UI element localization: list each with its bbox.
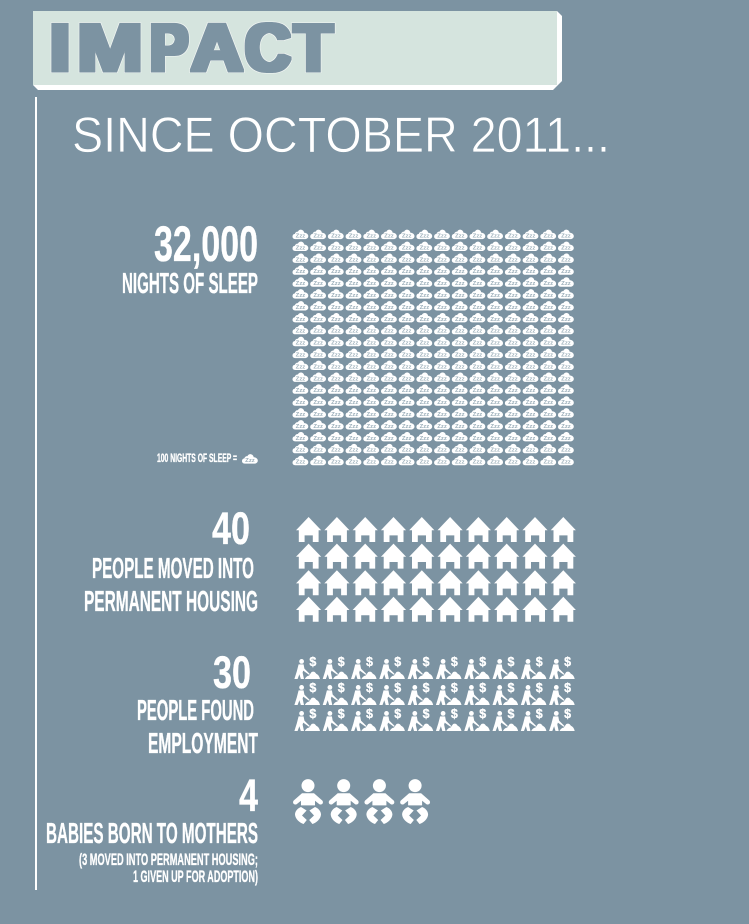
vertical rule — [35, 97, 37, 890]
title: IMPACT — [49, 10, 333, 86]
stat: 4 babies: BABIES BORN TO MOTHERS — [46, 818, 258, 850]
stat: 40 people housed: 40 — [212, 503, 250, 554]
stat: 4 babies — [46, 770, 258, 886]
stat: 4 babies: 1 GIVEN UP FOR ADOPTION) — [133, 867, 258, 886]
title: IMPACT: A — [191, 10, 243, 86]
stat: 32,000 nights of sleep — [122, 216, 258, 300]
title: IMPACT: T — [294, 10, 333, 86]
icon row: babies — [293, 779, 430, 824]
stat: 32,000 nights of sleep: NIGHTS OF SLEEP — [122, 268, 258, 300]
icon grid: houses — [296, 517, 576, 622]
title: IMPACT: M — [77, 10, 143, 86]
icon grid: clouds — [292, 230, 574, 466]
stat: 4 babies: (3 MOVED INTO PERMANENT HOUSING; — [79, 850, 258, 869]
stat: 4 babies: 4 — [239, 770, 258, 821]
subtitle: SINCE OCTOBER 2011... — [72, 107, 610, 163]
icon grid: workers — [294, 655, 575, 731]
title: IMPACT: I — [49, 10, 71, 86]
stat: 30 people employed: EMPLOYMENT — [148, 728, 258, 760]
legend: 100 nights of sleep: 100 NIGHTS OF SLEEP = — [157, 453, 237, 465]
stat: 40 people housed: PERMANENT HOUSING — [84, 586, 258, 618]
stat: 30 people employed — [137, 647, 258, 760]
stat: 30 people employed: 30 — [213, 647, 251, 698]
stat: 40 people housed — [84, 503, 258, 618]
stat: 32,000 nights of sleep: 32,000 — [154, 216, 258, 272]
title: IMPACT: C — [245, 10, 290, 86]
stat: 30 people employed: PEOPLE FOUND — [137, 695, 254, 727]
title: IMPACT: P — [150, 10, 188, 86]
title banner — [33, 10, 562, 90]
stat: 40 people housed: PEOPLE MOVED INTO — [92, 553, 254, 585]
